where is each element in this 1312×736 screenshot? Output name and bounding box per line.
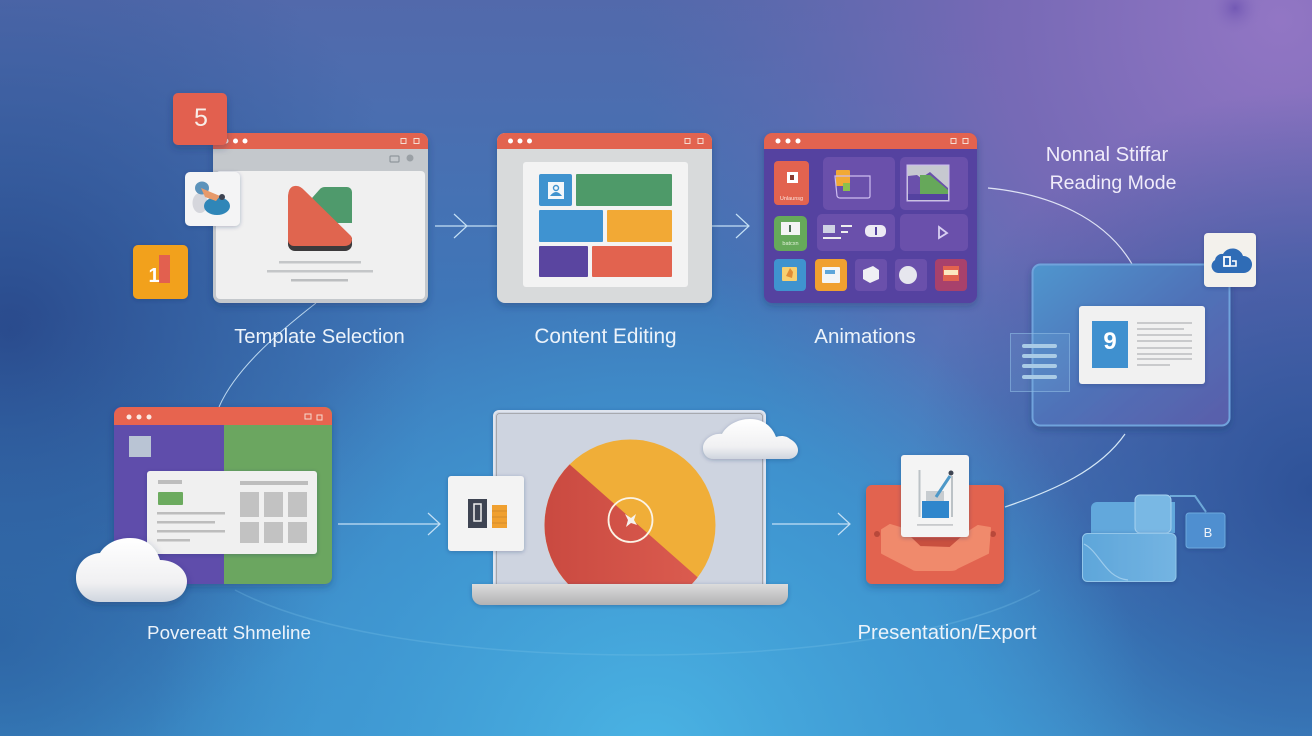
label: animations: Animations xyxy=(814,325,916,348)
icon: white cloud left xyxy=(76,538,187,602)
title bar xyxy=(114,407,332,425)
badge: number 1: 1 xyxy=(148,265,160,287)
panel: reading mode xyxy=(1010,264,1230,426)
label: presentation export: Presentation/Export xyxy=(857,622,1037,644)
inner dashboard card xyxy=(147,471,317,554)
connector: content to animations arrow xyxy=(712,214,749,238)
panel: template selection window xyxy=(213,133,428,303)
panel: laptop xyxy=(470,409,790,608)
pie chart xyxy=(544,440,716,584)
icon: small card on laptop xyxy=(448,476,524,551)
layout blocks xyxy=(539,174,672,277)
icon: person card xyxy=(185,172,240,226)
document card xyxy=(1079,306,1205,384)
animation tiles row 2: batcxn xyxy=(782,241,799,247)
label: template selection: Template Selection xyxy=(234,326,405,348)
small thumbnail xyxy=(129,436,151,457)
label: reading mode: Reading Mode xyxy=(1050,172,1176,194)
badge: number 1 xyxy=(133,245,188,299)
laptop base xyxy=(472,584,788,605)
connector: reading mode to export curve xyxy=(1005,434,1125,507)
label: nonnal stiffar: Nonnal Stiffar xyxy=(1046,144,1168,166)
key badge xyxy=(1186,513,1225,548)
connector: template to content arrow xyxy=(435,214,497,238)
connector: timeline to laptop arrow xyxy=(338,513,440,535)
animation tiles row 1 xyxy=(774,157,968,210)
sidebar list card xyxy=(1010,334,1070,392)
animation tiles row 1: Unlaunsg xyxy=(780,196,803,202)
title bar xyxy=(764,133,977,149)
badge: number 5 xyxy=(173,93,227,145)
connector: laptop to export arrow xyxy=(772,513,850,535)
connector: animations to reading mode curve xyxy=(988,188,1132,264)
title bar xyxy=(497,133,712,149)
key badge: B xyxy=(1204,525,1212,540)
connector: template to bottom left curve xyxy=(219,303,316,407)
icon: folder xyxy=(1082,495,1225,582)
icon: cloud badge xyxy=(1204,233,1256,287)
icon: cloud on laptop xyxy=(703,419,798,459)
animation tiles row 3 xyxy=(774,259,967,291)
panel: content editing window xyxy=(497,133,712,303)
panel: animations window xyxy=(764,133,977,303)
export document xyxy=(901,455,969,537)
document card: 9 xyxy=(1103,328,1117,355)
panel: bottom left window xyxy=(114,407,332,584)
slide glyph xyxy=(288,186,352,251)
panel: export tray xyxy=(866,455,1004,584)
animation tiles row 2 xyxy=(774,214,968,251)
label: content editing: Content Editing xyxy=(534,325,677,348)
title bar xyxy=(213,133,428,149)
label: povereatt shmeline: Povereatt Shmeline xyxy=(147,622,311,643)
badge: number 5: 5 xyxy=(194,104,208,132)
